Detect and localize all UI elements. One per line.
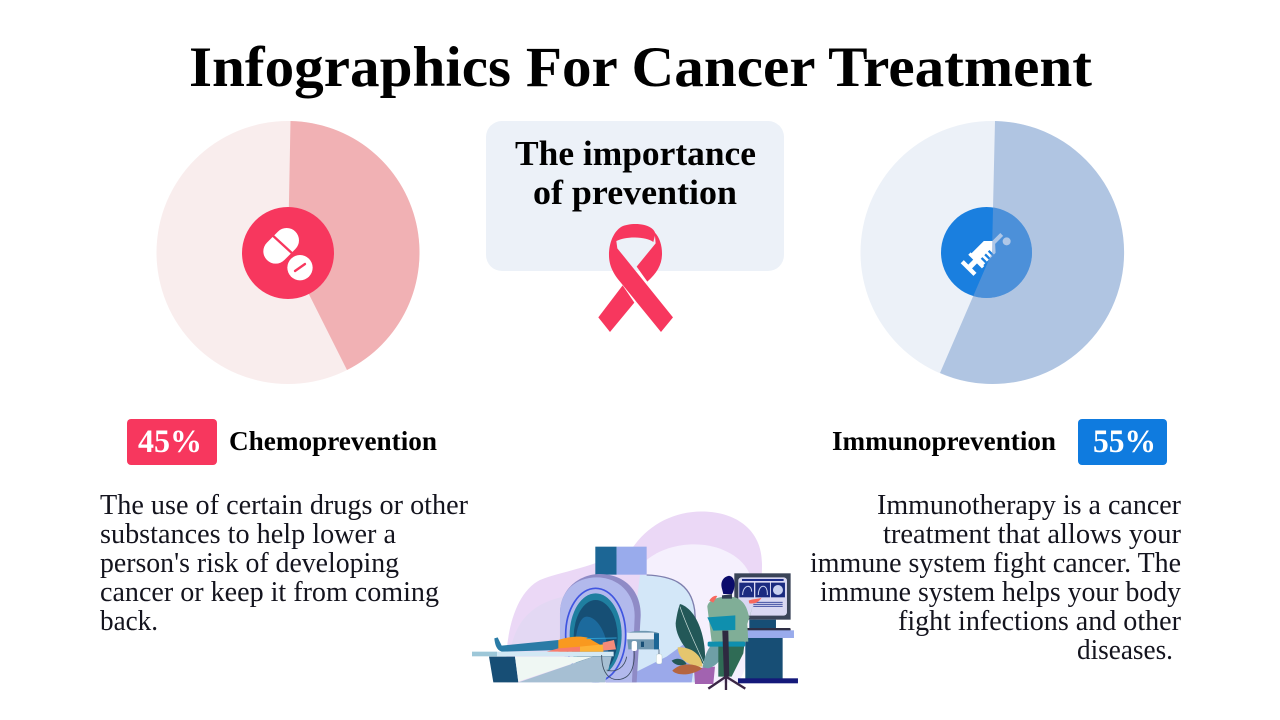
text block: immunoprevention description: diseases. (1077, 635, 1173, 666)
text block: immunoprevention description: Immunotherapy is a cancer (877, 490, 1182, 521)
heading line 1: The importance (515, 134, 756, 173)
badge: 55% (1078, 419, 1167, 465)
scanner body (560, 547, 699, 682)
panel: importance of prevention (486, 121, 784, 332)
patient (494, 637, 617, 652)
label: Chemoprevention: Chemoprevention (229, 426, 437, 456)
panel: chemoprevention pie chart (156, 121, 420, 384)
background blobs (506, 512, 762, 682)
text block: immunoprevention description: immune system helps your body (820, 577, 1181, 608)
text block: chemoprevention description: The use of certain drugs or other (100, 490, 469, 521)
illustration: MRI scanner with patient and doctor (472, 512, 798, 690)
value: 55%: 55% (1093, 424, 1156, 460)
badge: 45% (127, 419, 217, 465)
pie remainder: 55% (156, 121, 420, 384)
label: Immunoprevention: Immunoprevention (832, 426, 1056, 456)
text block: immunoprevention description (810, 490, 1182, 666)
control device (627, 631, 662, 664)
callout box (486, 121, 784, 271)
cables (602, 650, 634, 680)
text block: chemoprevention description (100, 490, 469, 637)
plant (672, 604, 724, 684)
text block: chemoprevention description: back. (100, 606, 158, 637)
icon: syringe (941, 207, 1032, 298)
panel: immunoprevention pie chart (860, 121, 1124, 384)
text block: immunoprevention description: fight infections and other (898, 606, 1182, 637)
text block: chemoprevention description: substances to help lower a (100, 519, 397, 550)
text block: chemoprevention description: person's risk of developing (100, 548, 399, 579)
value: 45%: 45% (138, 424, 202, 460)
doctor on chair (707, 576, 762, 690)
text block: immunoprevention description: treatment that allows your (883, 519, 1182, 550)
pie slice: 55% (940, 121, 1124, 384)
title: Infographics For Cancer Treatment (189, 36, 1092, 99)
legend: immunoprevention (832, 419, 1167, 465)
pie slice: 45% (288, 121, 420, 370)
text block: immunoprevention description: immune system fight cancer. The (810, 548, 1181, 579)
heading line 2: of prevention (533, 173, 737, 212)
icon: pills (242, 207, 334, 299)
icon: awareness ribbon (598, 224, 673, 332)
pie remainder: 45% (860, 121, 1124, 384)
table (472, 652, 614, 682)
computer monitor and desk (734, 573, 798, 683)
text block: chemoprevention description: cancer or keep it from coming (100, 577, 439, 608)
legend: chemoprevention (127, 419, 437, 465)
